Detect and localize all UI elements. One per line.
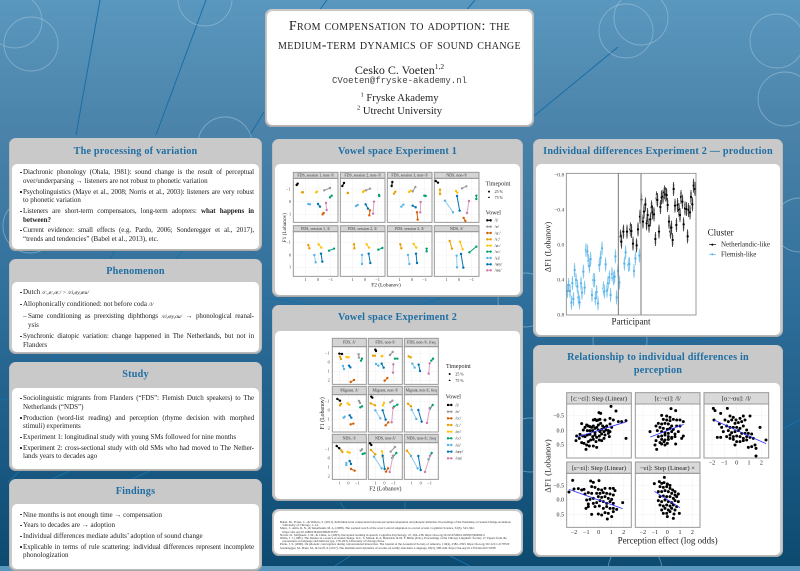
reference list: Babel, M., Fraser, C., & Walters, S. (2013). Individual-level connections between perceptual adaptation and phonetic imitation. Proceedings of the Workshop on Sound Change Actuation, University of Chicago, 1–14.	[280, 520, 511, 527]
text block: “trends and tendencies” (Babel et al., 2013), etc.	[23, 235, 158, 243]
axis ticks: 1	[748, 461, 750, 467]
axis ticks: 0.0	[556, 498, 564, 504]
reference list: Sonderegger, M., Bane, M., & Graff, P. (2017). The medium-term dynamics of accents on reality television. Language, 93(3), 598–640. https://doi.org/10.1353/lan.2017.0038	[280, 546, 496, 550]
heading: The processing of variation	[74, 146, 197, 156]
facet strips: Migrant, non-/l/, freq	[406, 389, 437, 394]
data: /ɑu/	[326, 201, 469, 214]
y axis ticks: 0.4	[557, 277, 564, 283]
facet strips: FDS, session 1, /l/	[301, 226, 331, 232]
axis ticks	[553, 414, 763, 536]
heading: Vowel space Experiment 1	[338, 146, 457, 156]
data: /ɛː/	[302, 190, 452, 249]
axis ticks: 1	[351, 277, 354, 282]
text block: Explicable in terms of rule scattering: individual differences represent incomplete	[23, 543, 254, 551]
legend: timepoint and vowel: /ɛː/	[455, 422, 462, 427]
reference list: Maye, J., Aslin, R. N., & Tenenbaum, M. A. (2008). The weckud wetch of the wast: Lexical adaptation to a novel accent. Cognitive Science, 32(3), 543–562. https://doi.org/10.1080/03640210802035357	[280, 526, 475, 534]
axis ticks: 2	[328, 426, 330, 431]
panel: findings	[9, 479, 262, 571]
axis ticks: −1	[422, 277, 427, 282]
facet strips: Migrant, /l/	[340, 388, 359, 394]
legend: timepoint and vowel: 25 %	[495, 189, 504, 194]
axis ticks: 0	[328, 408, 330, 413]
title panel	[265, 9, 534, 127]
text block	[20, 511, 254, 559]
axis ticks: 2	[328, 473, 330, 478]
y axis title: F1 (Lobanov)	[281, 213, 288, 242]
facet strips: NDS, /l/	[450, 226, 464, 232]
heading: Phenomenon	[106, 266, 165, 276]
facet strips: NDS, /l/	[343, 436, 357, 442]
text block: Flanders	[23, 341, 47, 349]
data: /ɑː/	[351, 378, 388, 472]
facet strips: FDS, session 3, non-/l/	[391, 173, 429, 179]
data: /ɑː/	[323, 210, 465, 221]
y axis title: ΔF1 (Lobanov)	[544, 222, 553, 272]
text block: Experiment 1: longitudinal study with young SMs followed for nine months	[23, 433, 236, 441]
facet strips: [ɛ~ɛi]: Step (Linear)	[572, 465, 626, 472]
poster title: medium-term dynamics of sound change	[278, 38, 521, 53]
legend: timepoint and vowel: Timepoint	[486, 182, 511, 188]
heading: Vowel space Experiment 2	[338, 312, 457, 322]
legend: timepoint and vowel: /øː/	[455, 429, 462, 434]
axis ticks: −2	[571, 530, 577, 536]
legend: timepoint and vowel: Vowel	[446, 395, 461, 401]
legend: timepoint and vowel: /oː/	[455, 436, 462, 441]
facet strips	[567, 393, 769, 473]
panel: individual differences experiment 2	[533, 139, 783, 337]
y axis ticks: 0.0	[557, 243, 564, 249]
panel: references	[272, 509, 523, 556]
y axis title: F1 (Lobanov)	[319, 397, 326, 429]
axis ticks: 1	[398, 277, 401, 282]
email: CVoeten@fryske-akademy.nl	[332, 76, 467, 86]
axis ticks	[325, 351, 432, 485]
author: Cesko C. Voeten1,2	[355, 62, 444, 77]
legend: timepoint and vowel: /œy/	[495, 262, 503, 267]
axis ticks: 0.5	[556, 512, 564, 518]
axis ticks: 1	[678, 530, 682, 536]
data: /ɑu/	[390, 363, 430, 472]
legend: timepoint and vowel: /ɑː/	[495, 230, 501, 235]
legend: timepoint and vowel: /ɛː/	[495, 237, 501, 242]
facet strips: FDS, session 1, non-/l/	[297, 173, 335, 179]
affiliations: 1 Fryske Akademy	[360, 91, 438, 104]
chart: vowel space experiment 2	[319, 338, 471, 492]
facet strips	[293, 172, 479, 232]
x axis title: Perception effect (log odds)	[618, 536, 718, 546]
text block: phonologization	[23, 551, 68, 559]
facet strips: NDS, non-/l/	[375, 436, 397, 442]
poster title	[278, 18, 521, 53]
axis ticks: −1	[469, 277, 474, 282]
legend: cluster: Cluster	[708, 227, 734, 237]
axis ticks: −1	[325, 399, 329, 404]
data: /œy/	[349, 364, 422, 470]
axis ticks: 1	[289, 212, 291, 217]
axis ticks: −0.5	[553, 483, 564, 489]
axis ticks: 0	[317, 277, 319, 282]
text block: Individual differences mediate adults’ adoption of sound change	[23, 532, 203, 540]
chart: perception scatterplots	[542, 392, 770, 546]
axis ticks: −1	[427, 480, 432, 485]
facet strips: Migrant, non-/l/	[373, 388, 399, 394]
data: /øː/	[346, 356, 384, 457]
data: /i/	[297, 181, 438, 186]
axis ticks: 1	[328, 417, 330, 422]
poster title: From compensation to adoption: the	[289, 18, 510, 34]
heading: Individual differences Experiment 2 — production	[543, 146, 773, 156]
reference list: Pardo, J. S. (2006). On phonetic convergence during conversational interaction. The Journal of the Acoustical Society of America, 119(4), 2382–2393. https://doi.org/10.1121/1.2178720	[280, 542, 509, 546]
y axis ticks: −0.4	[554, 208, 564, 214]
text block: Production (word-list reading) and perception (rhyme decision with morphed	[23, 414, 254, 422]
axis ticks: 0	[364, 277, 366, 282]
legend: timepoint and vowel: /œy/	[455, 449, 464, 454]
legend: timepoint and vowel: /e/	[495, 224, 500, 229]
facet strips: FDS, session 2, non-/l/	[344, 173, 382, 179]
legend: timepoint and vowel: Timepoint	[446, 364, 471, 370]
text block: over/underparsing → listeners are not robust to phonetic variation	[23, 177, 208, 185]
axis ticks: 2	[622, 530, 625, 536]
axis ticks: −0.5	[553, 414, 564, 420]
data: /ɛi/	[343, 364, 418, 468]
facet strips: NDS, non-/l/	[446, 173, 468, 179]
axis ticks: 1	[374, 480, 377, 485]
axis ticks: 1	[445, 277, 448, 282]
axis ticks: −1	[355, 480, 360, 485]
legend: cluster: Flemish-like	[721, 251, 756, 259]
text block: Diachronic phonology (Ohala, 1981): sound change is the result of perceptual	[23, 168, 254, 176]
legend: timepoint and vowel: /ɑu/	[495, 268, 502, 273]
data: /øː/	[316, 191, 463, 249]
axis ticks: 0	[411, 277, 413, 282]
legend: timepoint and vowel	[486, 182, 511, 273]
affiliations: 2 Utrecht University	[357, 104, 442, 117]
text block: stimuli) experiments	[23, 422, 81, 430]
legend: timepoint and vowel: 25 %	[455, 371, 464, 376]
axis ticks: −1	[325, 351, 329, 356]
axis ticks: 0	[420, 480, 422, 485]
axis ticks: 1	[328, 369, 330, 374]
text block: Same conditioning as preexisting diphthongs /ɛi,œy,ɑu/ → phonological reanal-	[28, 312, 254, 320]
data: /e/	[359, 352, 395, 452]
axis ticks: 0	[597, 530, 600, 536]
axis ticks: 2	[691, 530, 694, 536]
panel: phenomenon	[9, 259, 262, 354]
flemish-like participants	[567, 248, 639, 303]
x axis title: Participant	[612, 317, 651, 327]
axis ticks: −1	[583, 530, 590, 536]
text block: Current evidence: small effects (e.g. Pardo, 2006; Sonderegger et al., 2017),	[23, 226, 254, 234]
axis ticks: 1	[411, 480, 413, 485]
axis ticks: −1	[328, 277, 333, 282]
data: /i/	[337, 350, 376, 448]
axis ticks: 0	[458, 277, 460, 282]
chart: individual differences production	[544, 172, 770, 327]
axis ticks: −2	[709, 461, 715, 467]
data: /œy/	[318, 196, 463, 268]
axis ticks: −1	[286, 240, 291, 245]
plot frame and cluster dividers	[566, 173, 696, 315]
axis ticks: −1	[286, 186, 291, 191]
data: /ɛː/	[340, 356, 411, 456]
legend: timepoint and vowel: /ɑu/	[455, 456, 463, 461]
panel: relationship to individual differences in perception	[533, 345, 783, 557]
text block: lands years to decades ago	[23, 452, 97, 460]
x axis title: F2 (Lobanov)	[371, 281, 401, 288]
legend: timepoint and vowel: /øː/	[495, 243, 501, 248]
axis ticks: −1	[652, 530, 658, 536]
axis ticks: −1	[375, 277, 380, 282]
text block: Years to decades are → adoption	[23, 521, 115, 529]
legend: timepoint and vowel	[446, 364, 471, 461]
axis ticks: 0	[289, 252, 291, 257]
axis ticks: 0	[383, 480, 386, 485]
legend: timepoint and vowel: 75 %	[455, 378, 464, 383]
data: /oː/	[329, 195, 476, 252]
text block: Netherlands (“NDS”)	[23, 403, 83, 411]
facet strips: [ɛː~ɛi]: /l/	[654, 396, 681, 403]
reference list: Ohala, J. J. (1981). The listener as a source of sound change. In C. S. Masek, R. A. Hendrick, & M. F. Miller (Eds.), Proceedings of the Chicago Linguistic Society 17: Papers from the parasession on language and behavior (pp. 178–203). University of Chicago Press.	[280, 536, 507, 543]
axis ticks: 2	[328, 378, 330, 383]
scatter: facet 4	[569, 480, 623, 519]
axis ticks: 0	[289, 199, 291, 204]
text block: Listeners are short-term compensators, long-term adopters: what happens in	[23, 207, 254, 215]
axis ticks: 0.5	[556, 443, 564, 449]
data: /e/	[324, 186, 466, 191]
facet strips: FDS, non-/l/, freq	[407, 340, 436, 346]
reference list: Norris, D., McQueen, J. M., & Cutler, A. (2003). Perceptual learning in speech. Cognitive Psychology, 47, 204–238. https://doi.org/10.1016/S0010-0285(03)00006-9	[280, 533, 485, 537]
scatter: facet 3	[713, 408, 766, 456]
axis ticks: 1	[610, 530, 613, 536]
axis ticks: 1	[328, 464, 330, 469]
axis ticks: 1	[339, 480, 341, 485]
text block: Nine months is not enough time → compensation	[23, 511, 162, 519]
axis ticks: 0.0	[556, 428, 564, 434]
heading: Findings	[116, 486, 155, 496]
axis ticks	[286, 186, 474, 282]
y axis title: ΔF1 (Lobanov)	[542, 439, 552, 493]
facet strips: FDS, session 2, /l/	[348, 226, 378, 232]
axis ticks: 1	[289, 265, 291, 270]
scatter: facet 5	[654, 477, 680, 518]
text block: to phonetic variation	[23, 196, 81, 204]
heading: Relationship to individual differences in perception	[567, 352, 749, 376]
legend: timepoint and vowel: 75 %	[495, 195, 504, 200]
scatter: facet 1	[576, 406, 627, 449]
axis ticks: −1	[325, 446, 329, 451]
text block: Synchronic diatopic variation: change happened in The Netherlands, but not in	[23, 332, 254, 340]
netherlandic-like participants	[621, 186, 695, 245]
facet strips: [ɑː~ɑu]: /l/	[722, 396, 751, 403]
axis ticks: 2	[760, 461, 763, 467]
axis ticks: −1	[391, 480, 396, 485]
panel: vowel space experiment 2	[272, 305, 523, 501]
text block: Experiment 2: cross-sectional study with old SMs who had moved to The Nether-	[23, 444, 254, 452]
text block: between?	[23, 216, 51, 224]
axis ticks: −2	[640, 530, 646, 536]
axis ticks: 0	[735, 461, 738, 467]
y axis ticks: −0.8	[554, 173, 564, 179]
facet strips: ~ɛi]: Step (Linear) ×	[640, 465, 695, 472]
legend: cluster: Netherlandic-like	[721, 241, 770, 249]
legend: timepoint and vowel: /oː/	[495, 249, 501, 254]
legend: timepoint and vowel: /ɛi/	[495, 255, 501, 260]
legend: timepoint and vowel: /i/	[495, 218, 499, 223]
axis ticks: 1	[304, 277, 307, 282]
facet strips: NDS, non-/l/, freq	[407, 436, 436, 442]
text block: ysis	[28, 321, 39, 329]
legend: timepoint and vowel: /e/	[455, 409, 460, 414]
data: /oː/	[360, 359, 433, 459]
y axis ticks	[554, 173, 564, 318]
affiliations	[357, 91, 442, 117]
facet strips: FDS, /l/	[343, 340, 357, 346]
axis ticks: 0	[328, 455, 330, 460]
axis ticks: −1	[721, 461, 728, 467]
text block	[20, 394, 254, 460]
y axis ticks: 0.8	[557, 312, 564, 318]
panel: the processing of variation	[9, 138, 262, 251]
axis ticks: 0	[666, 530, 669, 536]
text block: Psycholinguistics (Maye et al., 2008; Norris et al., 2003): listeners are very robust	[23, 188, 254, 196]
axis ticks: 0	[328, 360, 330, 365]
facet strips	[332, 338, 438, 443]
panel: vowel space experiment 1	[272, 139, 523, 297]
panel: study	[9, 362, 262, 471]
text block: Allophonically conditioned: not before coda /l/	[23, 300, 153, 308]
text block: Sociolinguistic migrants from Flanders (“FDS”: Flemish Dutch speakers) to The	[23, 394, 254, 402]
heading: Study	[122, 368, 149, 380]
facet strips: FDS, non-/l/	[375, 340, 396, 346]
text block	[20, 288, 254, 349]
axis ticks: 0	[347, 480, 350, 485]
chart: vowel space experiment 1	[281, 172, 511, 288]
legend: timepoint and vowel: /ɑː/	[455, 416, 462, 421]
facet strips: [ɛː~ɛi]: Step (Linear)	[571, 396, 627, 403]
text block: Dutch /ɛː,øː,œː/ > /ɛi,øy,œu/	[23, 288, 89, 296]
legend: cluster	[708, 227, 770, 259]
text block	[20, 168, 254, 243]
legend: timepoint and vowel: Vowel	[486, 210, 501, 216]
x axis title: F2 (Lobanov)	[369, 485, 401, 492]
facet strips: FDS, session 3, /l/	[395, 226, 425, 232]
reference list	[280, 520, 511, 550]
data: /ɛi/	[308, 201, 457, 267]
scatter: facet 2	[650, 409, 684, 449]
legend: timepoint and vowel: /ɛi/	[455, 442, 462, 447]
legend: timepoint and vowel: /i/	[455, 402, 460, 407]
